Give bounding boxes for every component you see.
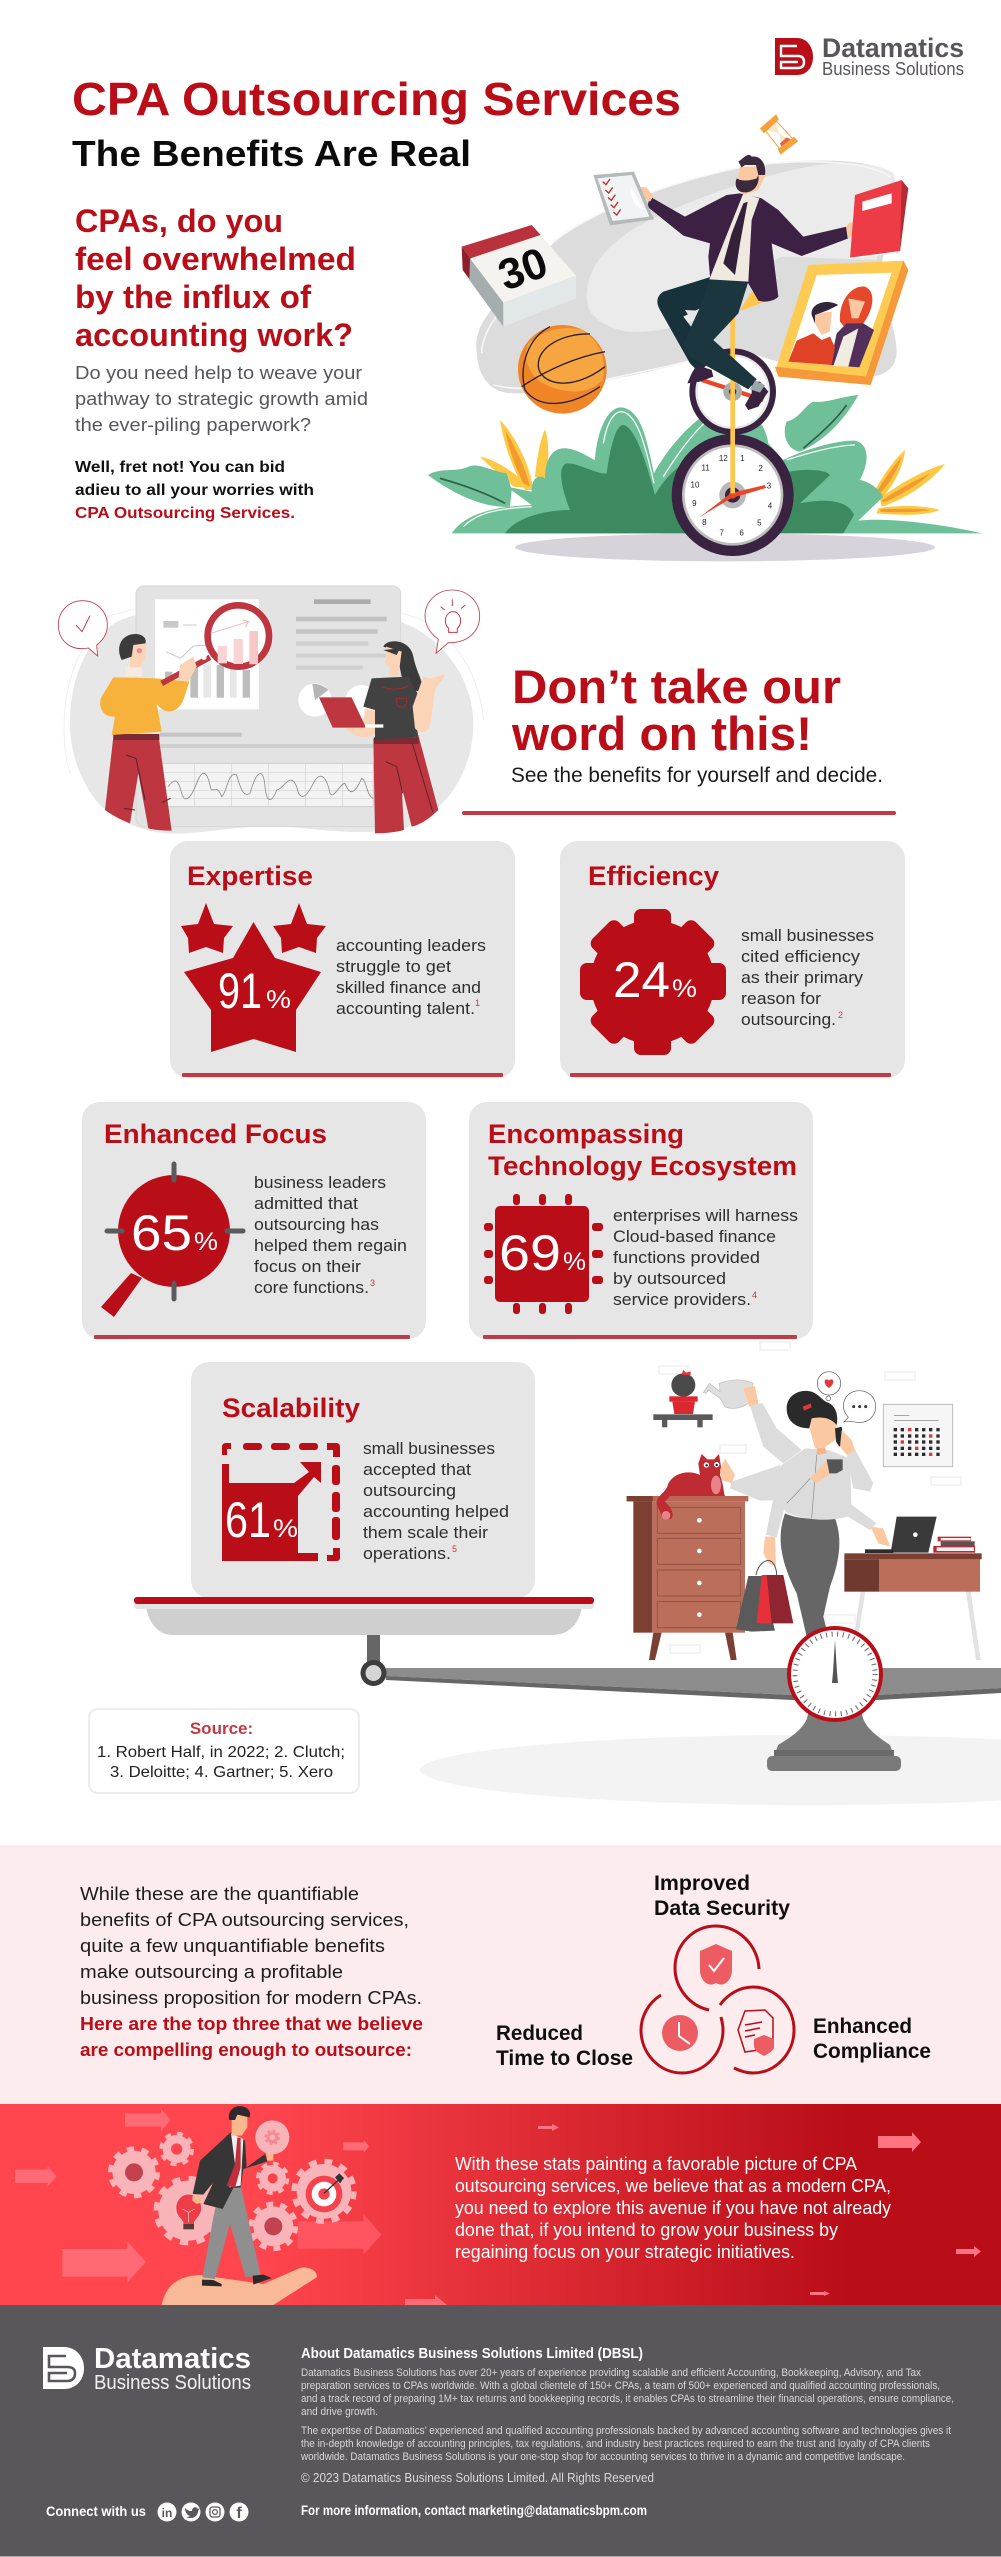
office illustration: multitasking woman [627, 1370, 982, 1660]
about paragraph 2: worldwide. Datamatics Business Solutions is your one-stop shop for accounting services to thrive in a dynamic and competitive landscape. [300, 2451, 905, 2463]
text: efficiency description: outsourcing. [741, 1011, 836, 1029]
woman with red book [319, 641, 445, 833]
arrows [15, 2109, 382, 2282]
woman lower arms [766, 1463, 877, 1537]
text: efficiency description [741, 927, 874, 1029]
panel: efficiency [560, 841, 905, 1078]
calendar: 30 [492, 239, 554, 300]
stat: 24% [613, 952, 697, 1008]
text: scalability description: 5 [452, 1544, 457, 1554]
call to action text [75, 459, 314, 522]
banner illustration [15, 2106, 382, 2305]
clock wheel: 7 [719, 528, 724, 537]
tie [723, 202, 748, 275]
text: efficiency description: reason for [741, 990, 822, 1008]
logo: Datamatics top right: Business Solutions [822, 59, 964, 79]
heading: don't take our word: Don’t take our [512, 660, 841, 713]
thought bubble: heart [817, 1372, 841, 1401]
calendar [462, 225, 576, 327]
text: scalability description: them scale their [363, 1524, 489, 1542]
social icons: f [236, 2505, 242, 2522]
weighing scale [134, 1597, 1001, 1771]
stat: 61%: 61 [225, 1492, 271, 1548]
text: benefits intro [80, 1883, 422, 2008]
scale base [767, 1712, 901, 1771]
scale dial [789, 1628, 881, 1720]
hourglass [761, 115, 797, 154]
panel: enhanced focus [82, 1102, 426, 1339]
logo: Datamatics white: Business Solutions [94, 2372, 251, 2394]
contact line: For more information, contact marketing@datamaticsbpm.com [301, 2503, 647, 2518]
label: reduced time to close: Time to Close [496, 2047, 633, 2070]
icon: document with shield [738, 2010, 774, 2056]
clock wheel: 6 [739, 528, 744, 537]
clock wheel: 11 [702, 463, 710, 472]
clock wheel: 5 [757, 518, 762, 527]
clock wheel [672, 434, 794, 556]
subtitle: The Benefits Are Real [72, 133, 471, 174]
plants [428, 395, 982, 533]
panel: enhanced focus: Enhanced Focus [104, 1119, 327, 1149]
clock wheel: 9 [692, 499, 697, 508]
stat: 69%: % [563, 1248, 586, 1276]
text: scalability description: accepted that [363, 1461, 471, 1479]
text: technology description [613, 1207, 798, 1309]
question heading: CPAs, do you [75, 203, 283, 239]
clock wheel: 4 [768, 501, 773, 510]
banner text: regaining focus on your strategic initiatives. [455, 2241, 795, 2262]
banner background [0, 2104, 1001, 2305]
text: technology description: enterprises will harness [613, 1207, 798, 1225]
target with dart [306, 2173, 344, 2212]
banner text: you need to explore this avenue if you have not already [455, 2197, 892, 2218]
icon: stars [181, 903, 326, 1052]
stat: 65% [131, 1205, 218, 1261]
label: improved data security: Data Security [654, 1897, 790, 1920]
illustration: analysts reviewing report [58, 586, 483, 834]
text: technology description: Cloud-based finance [613, 1228, 776, 1246]
divider line [462, 811, 896, 815]
text: technology description: service providers. [613, 1291, 751, 1309]
stat: 65%: % [194, 1228, 218, 1256]
text: focus description: admitted that [254, 1195, 358, 1213]
shopping bags [736, 1561, 793, 1632]
icon: gear [580, 909, 726, 1055]
speech bubble: dots [843, 1391, 876, 1423]
banner text: outsourcing services, we believe that as a modern CPA, [455, 2175, 891, 2196]
watering can [703, 1380, 753, 1408]
text: expertise description: accounting leaders [336, 937, 486, 955]
banner text: done that, if you intend to grow your business by [455, 2219, 839, 2240]
pan stem and pivot [360, 1635, 386, 1686]
label: improved data security: Improved [654, 1872, 750, 1895]
man with magnifier [100, 605, 269, 831]
ground shadow [515, 533, 935, 561]
panel: expertise: Expertise [187, 861, 313, 891]
text: top three highlight: Here are the top three that we believe [80, 2013, 423, 2034]
beam [386, 1668, 1001, 1700]
text: expertise description [336, 937, 486, 1018]
text: scalability description: operations. [363, 1545, 451, 1563]
stat: 69%: 69 [499, 1225, 561, 1281]
text: expertise description: accounting talent. [336, 1000, 475, 1018]
label: reduced time to close: Reduced [496, 2022, 583, 2045]
text: focus description: helped them regain [254, 1237, 407, 1255]
gears [110, 2120, 354, 2249]
icon: chip [484, 1194, 603, 1314]
speech bubble: check [58, 601, 107, 656]
text: technology description: by outsourced [613, 1270, 726, 1288]
text: benefits intro: business proposition for modern CPAs. [80, 1987, 422, 2008]
question heading: by the influx of [75, 279, 311, 315]
small wheel [689, 348, 776, 435]
panel: encompassing technology ecosystem: Encompassing [488, 1119, 684, 1149]
wall calendar [883, 1404, 953, 1467]
clock wheel: 2 [758, 464, 763, 473]
panel: scalability: Scalability [222, 1393, 360, 1423]
social icons: in [162, 2506, 172, 2520]
magnifier [201, 605, 269, 667]
light bulb [176, 2194, 201, 2229]
text: top three highlight: are compelling enough to outsource: [80, 2039, 412, 2060]
seat [699, 290, 765, 310]
source box: Source: [190, 1719, 253, 1738]
label: enhanced compliance [813, 2015, 931, 2063]
text: efficiency description: small businesses [741, 927, 874, 945]
red folder [850, 180, 908, 258]
text: focus description: business leaders [254, 1174, 386, 1192]
report panel [136, 586, 401, 827]
picture frame [775, 261, 908, 385]
icon: magnifier target [101, 1164, 243, 1317]
label: reduced time to close [496, 2022, 633, 2070]
text: efficiency description: as their primary [741, 969, 864, 987]
background blob [70, 615, 473, 834]
text: focus description: focus on their [254, 1258, 362, 1276]
stat: 69% [499, 1225, 586, 1281]
logo: Datamatics top right: Datamatics [822, 33, 964, 63]
label: enhanced compliance: Compliance [813, 2040, 931, 2063]
shelf with cactus [653, 1370, 713, 1427]
source box: 3. Deloitte; 4. Gartner; 5. Xero [110, 1764, 333, 1781]
cat hand [720, 1458, 735, 1483]
call to action text: Well, fret not! You can bid [75, 459, 285, 476]
scale pan [134, 1597, 594, 1635]
clock wheel: 8 [702, 518, 707, 527]
text: benefits intro: While these are the quantifiable [80, 1883, 359, 1904]
text: benefits intro: quite a few unquantifiable benefits [80, 1935, 385, 1956]
stat: 24%: 24 [613, 952, 670, 1008]
jacket [647, 193, 848, 302]
cat [657, 1454, 725, 1520]
text: expertise description: skilled finance and [336, 979, 481, 997]
cat arm [730, 1465, 783, 1501]
dresser [627, 1496, 748, 1660]
panel: encompassing technology ecosystem [469, 1102, 813, 1339]
text: benefits intro: benefits of CPA outsourcing services, [80, 1909, 409, 1930]
clock wheel: 12 [719, 454, 728, 463]
call to action text: adieu to all your worries with [75, 482, 314, 499]
social icons [158, 2502, 248, 2522]
stat: 61%: % [273, 1515, 298, 1543]
source box [89, 1709, 359, 1793]
text: scalability description: accounting helped [363, 1503, 509, 1521]
hands [634, 187, 862, 238]
title: CPA Outsourcing Services [72, 73, 681, 125]
source box: 1. Robert Half, in 2022; 2. Clutch; [97, 1744, 345, 1761]
text: technology description: 4 [752, 1290, 757, 1300]
text: focus description: outsourcing has [254, 1216, 379, 1234]
diagram: three interlocking rings [641, 1926, 794, 2073]
question heading: accounting work? [75, 317, 353, 353]
logo: Datamatics white: Datamatics [94, 2343, 251, 2375]
text: focus description [254, 1174, 407, 1297]
text: scalability description: outsourcing [363, 1482, 456, 1500]
text: focus description: 3 [370, 1278, 375, 1288]
panel: expertise [170, 841, 515, 1078]
heading: don't take our word [511, 660, 841, 760]
banner text: With these stats painting a favorable picture of CPA [455, 2153, 858, 2174]
outer decorative arc [64, 608, 483, 773]
clock wheel: 10 [691, 481, 700, 490]
logo: Datamatics white [43, 2343, 251, 2394]
text: technology description: functions provided [613, 1249, 760, 1267]
shirt [709, 193, 759, 282]
call to action text: CPA Outsourcing Services. [75, 505, 295, 522]
text: scalability description: small businesses [363, 1440, 495, 1458]
about paragraph 1: and drive growth. [301, 2406, 378, 2418]
desk with laptop and books [844, 1517, 982, 1660]
faint wall bricks [659, 1342, 961, 1653]
subheading: See the benefits for yourself and decide. [511, 764, 883, 787]
heading: don't take our word: word on this! [511, 707, 812, 760]
connect label: Connect with us [46, 2504, 146, 2519]
text: expertise description: 1 [475, 998, 480, 1008]
background blob [476, 161, 897, 393]
intro paragraph: the ever-piling paperwork? [75, 414, 311, 435]
stat: 65%: 65 [131, 1205, 192, 1261]
hands lower [763, 1527, 890, 1566]
about paragraph 2 [300, 2425, 952, 2463]
banner arrows right [405, 2124, 981, 2305]
intro paragraph [75, 362, 368, 435]
businessman walking [192, 2106, 273, 2286]
panel: footer [0, 2305, 1001, 2557]
about paragraph 1: Datamatics Business Solutions has over 20+ years of experience providing scalable and efficient Accounting, Bookkeeping, Advisory, and Tax [301, 2367, 921, 2379]
basketball [518, 325, 607, 414]
panel: efficiency: Efficiency [588, 861, 719, 891]
label: improved data security [654, 1872, 790, 1920]
about paragraph 1 [301, 2367, 954, 2418]
about paragraph 2: the in-depth knowledge of accounting principles, tax regulations, and industry best practices required to earn the trust and loyalty of CPA clients [301, 2438, 930, 2450]
text: focus description: core functions. [254, 1279, 369, 1297]
clock wheel: 3 [767, 482, 772, 491]
stat: 91%: % [266, 986, 291, 1014]
clock wheel: 1 [740, 454, 745, 463]
text: efficiency description: 2 [838, 1010, 843, 1020]
wave chart [162, 763, 373, 807]
upper arm [749, 1403, 802, 1463]
text: expertise description: struggle to get [336, 958, 451, 976]
clipboard [593, 172, 654, 225]
hand on can [743, 1386, 758, 1407]
logo: Datamatics top right [775, 33, 964, 79]
panel: scalability [191, 1362, 535, 1598]
question heading: feel overwhelmed [75, 241, 356, 277]
text: benefits intro: make outsourcing a profitable [80, 1961, 343, 1982]
stat: 91%: 91 [218, 963, 262, 1019]
icon: shield [700, 1944, 732, 1985]
text: top three highlight [80, 2013, 423, 2060]
intro paragraph: Do you need help to weave your [75, 362, 362, 383]
icon: clock [662, 2015, 698, 2051]
panel: encompassing technology ecosystem: Technology Ecosystem [488, 1151, 797, 1181]
head [737, 167, 765, 195]
legs [657, 277, 727, 370]
icon: scaling frame [222, 1443, 340, 1561]
text: efficiency description: cited efficiency [741, 948, 861, 966]
ground shadow [420, 1735, 1001, 1805]
banner text [455, 2153, 892, 2262]
businessman [634, 155, 862, 410]
intro paragraph: pathway to strategic growth amid [75, 388, 368, 409]
woman body [778, 1391, 873, 1637]
hand [162, 2268, 317, 2305]
stat: 24%: % [672, 975, 697, 1003]
shoes [687, 365, 768, 410]
label: enhanced compliance: Enhanced [813, 2015, 912, 2038]
question heading [75, 203, 356, 353]
hero illustration: businessman on unicycle [428, 115, 982, 561]
unicycle pole [726, 317, 740, 493]
panel: unquantifiable benefits [0, 1845, 1001, 2104]
text: scalability description [363, 1440, 509, 1563]
copyright: © 2023 Datamatics Business Solutions Limited. All Rights Reserved [301, 2470, 654, 2485]
speech bubble: idea bulb [425, 590, 480, 653]
about heading: About Datamatics Business Solutions Limited (DBSL) [301, 2345, 643, 2362]
